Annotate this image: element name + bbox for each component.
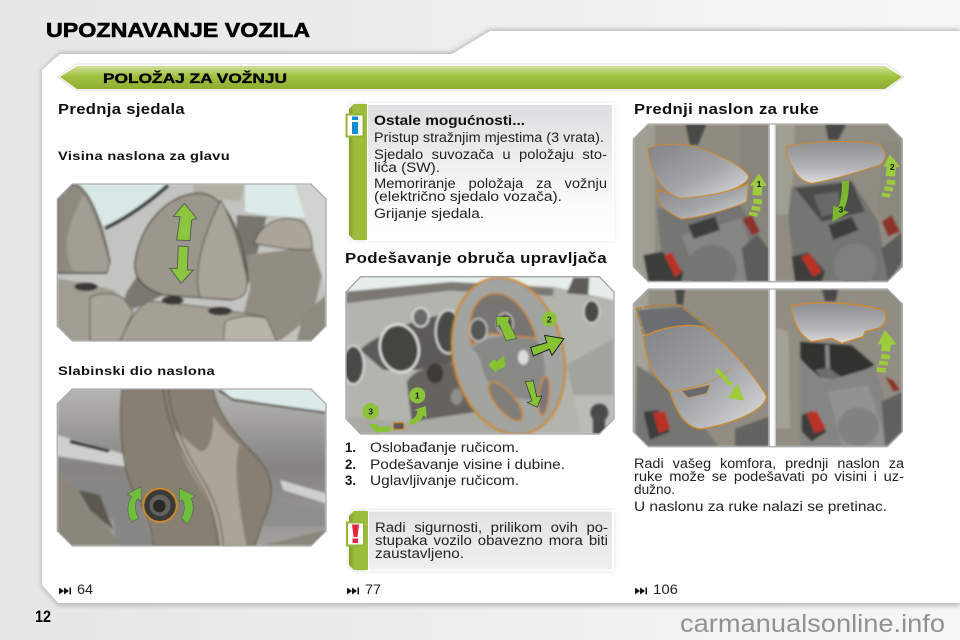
armrest slid forward: [643, 325, 767, 429]
banner heading: POLOŽAJ ZA VOŽNJU: [103, 69, 287, 86]
section banner: [58, 64, 904, 90]
heading: front seats: Prednja sjedala: [58, 102, 186, 118]
page reference 77: [347, 582, 381, 597]
page reference 106: [635, 582, 678, 597]
warning callout: [347, 510, 614, 571]
icon: warning: [347, 522, 364, 546]
icon: down arrow: [170, 246, 193, 283]
icon: left rotation arrow: [127, 487, 141, 522]
page reference 77: 77: [365, 582, 381, 597]
armrest closed position outline: [637, 305, 712, 335]
page reference 64: [59, 582, 94, 597]
icon: arrow down: [525, 381, 542, 407]
illustration: steering wheel: [345, 276, 615, 435]
numbered steps: Uglavljivanje ručicom.: [370, 473, 519, 488]
callout text: Grijanje sjedala.: [374, 206, 484, 221]
badge 1: [409, 387, 425, 403]
armrest description: dužno.: [634, 482, 675, 497]
callout heading: Ostale mogućnosti...: [374, 113, 525, 128]
armrest second panel: [786, 141, 885, 183]
numbered steps: Podešavanje visine i dubine.: [370, 457, 565, 472]
icon: arrow 2: 2: [890, 162, 895, 172]
warning text: zaustavljeno.: [375, 546, 464, 561]
icon: arrow 3: [368, 424, 391, 433]
armrest description: Radi vašeg komfora, prednji naslon za: [634, 456, 905, 471]
callout text: Sjedalo suvozača u položaju sto-: [374, 147, 607, 162]
icon: arrow 3: [832, 181, 849, 222]
white divider: [769, 124, 776, 282]
page reference 64: 64: [77, 582, 94, 597]
armrest description: [634, 456, 905, 514]
icon: right rotation arrow: [179, 488, 195, 524]
heading: front armrest: Prednji naslon za ruke: [634, 102, 819, 118]
numbered steps: Oslobađanje ručicom.: [370, 440, 519, 455]
numbered steps: 3.: [345, 473, 356, 488]
icon: arrow 1: 1: [757, 179, 762, 189]
badge 2: [542, 311, 557, 327]
icon: arrow 1: [409, 406, 427, 425]
icon: arrow 2: [881, 154, 900, 198]
icon: slide arrow: [714, 368, 744, 401]
callout text: (električno sjedalo vozača).: [374, 189, 562, 204]
info callout: [346, 103, 614, 241]
armrest description: U naslonu za ruke nalazi se pretinac.: [634, 499, 887, 514]
white divider: [769, 289, 776, 447]
steering wheel drawing: [449, 277, 568, 434]
badge 3: [362, 403, 379, 420]
warning text: Radi sigurnosti, prilikom ovih po-: [375, 520, 608, 535]
numbered steps: 2.: [345, 457, 356, 472]
warning text: stupaka vozilo obavezno mora biti: [375, 533, 608, 548]
page number: 12: [35, 607, 51, 626]
callout text: [374, 130, 607, 221]
title: UPOZNAVANJE VOZILA: [46, 19, 310, 42]
illustration: armrest height adjustment: [633, 124, 902, 292]
page reference 106: 106: [653, 582, 678, 597]
icon: info: [346, 114, 364, 136]
icon: lift arrow: [877, 330, 897, 373]
icon: arrow left on wheel: [488, 356, 505, 373]
icon: arrow 1: [749, 173, 767, 217]
icon: arrow 3: 3: [839, 205, 844, 214]
numbered steps: [345, 440, 565, 488]
illustration: headrest with height arrows: [57, 184, 326, 341]
illustration: lumbar adjustment knob: [57, 389, 326, 546]
badge 2: 2: [547, 314, 552, 324]
callout text: Pristup stražnjim mjestima (3 vrata).: [374, 130, 604, 145]
icon: adjustment knob: [143, 489, 177, 522]
subheading: headrest height: Visina naslona za glavu: [58, 149, 230, 163]
badge 3: 3: [368, 407, 373, 417]
heading: steering wheel adjustment: Podešavanje obruča upravljača: [345, 251, 608, 267]
badge 1: 1: [415, 391, 420, 401]
callout text: lića (SW).: [374, 160, 440, 175]
armrest raised position: [648, 144, 749, 198]
callout text: Memoriranje položaja za vožnju: [374, 176, 607, 191]
armrest raised lid: [791, 303, 886, 343]
icon: arrow right: [531, 335, 564, 356]
numbered steps: 1.: [345, 440, 356, 455]
illustration: armrest storage compartment: [633, 289, 902, 447]
armrest description: ruke može se podešavati po visini i uz-: [634, 469, 904, 484]
icon: up arrow: [173, 203, 197, 241]
watermark: carmanualsonline.info: [680, 610, 945, 638]
icon: arrow up on wheel: [496, 317, 517, 341]
subheading: lumbar support: Slabinski dio naslona: [58, 364, 215, 378]
warning text: [375, 520, 608, 561]
armrest lower position: [657, 183, 748, 219]
